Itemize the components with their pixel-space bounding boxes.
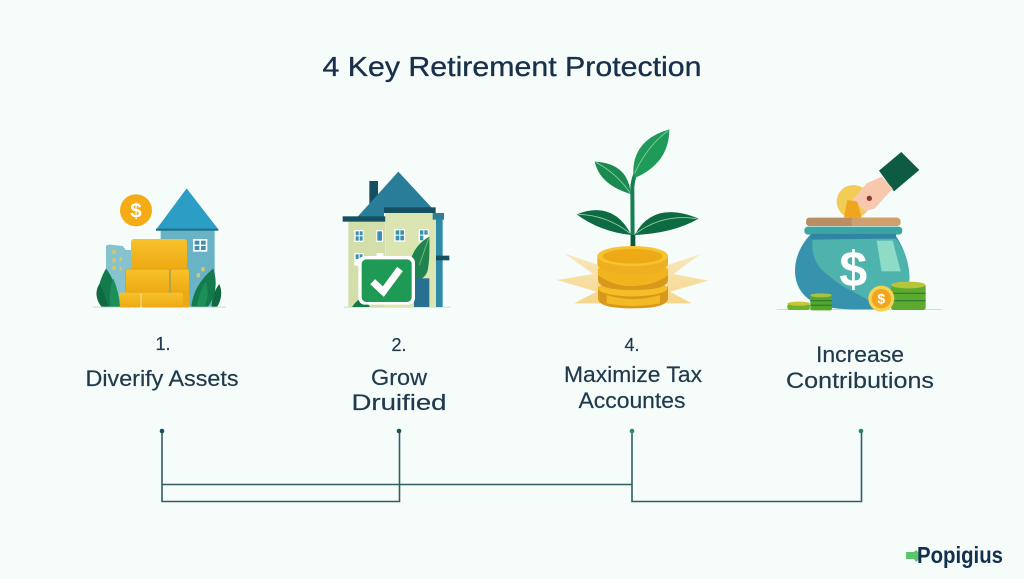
windows: [354, 229, 429, 266]
step 1 label: Diverify Assets: [86, 366, 238, 391]
house roof: [156, 188, 218, 231]
hand sleeve: [879, 152, 919, 191]
coin: $: [130, 200, 142, 223]
upper right leaf: [633, 129, 669, 178]
connector diagram: [160, 429, 863, 502]
icon: house with check badge: [343, 172, 451, 308]
right wing: [385, 212, 436, 307]
window: [193, 239, 207, 252]
step 2 label: [352, 335, 446, 415]
lower left leaf: [577, 210, 631, 235]
bag neck: [804, 218, 902, 239]
dollar sign: $: [839, 242, 867, 298]
stem: [632, 170, 637, 247]
step 4 label: 4.: [624, 335, 640, 355]
increase contributions label: Contributions: [786, 368, 934, 393]
check badge: [358, 256, 415, 305]
step 2 label: Grow: [371, 365, 427, 390]
small stacks: [787, 293, 832, 310]
logo: Popigius: [917, 542, 1003, 568]
step 4 label: [564, 335, 702, 413]
front coin: $: [877, 291, 885, 307]
step 1 label: 1.: [155, 334, 171, 354]
hand: [844, 177, 893, 217]
step 2 label: Druified: [352, 390, 446, 415]
step 4 label: Accountes: [578, 388, 686, 413]
step 1 label: [86, 334, 238, 391]
left wing: [348, 221, 385, 307]
house body: [161, 230, 215, 307]
ground line: [93, 306, 226, 309]
gold bars: [119, 239, 189, 307]
roof: [357, 172, 432, 217]
ground line: [344, 306, 451, 309]
icon: hand dropping coin in money bag: [777, 152, 942, 312]
increase contributions label: [786, 342, 934, 393]
burst: [557, 253, 708, 303]
lower right leaf: [635, 212, 699, 235]
ground line: [777, 308, 942, 311]
upper left leaf: [595, 162, 631, 194]
right leaves: [191, 268, 221, 307]
city building: [106, 245, 133, 307]
increase contributions label: Increase: [816, 342, 904, 367]
bag highlight: [877, 241, 901, 271]
coin stack: [597, 246, 668, 308]
left leaves: [96, 268, 120, 307]
bag body: [795, 235, 909, 309]
side pipe: [433, 213, 449, 307]
icon: plant growing from coins: [557, 129, 708, 308]
front coin: [868, 286, 894, 312]
large stack: [891, 282, 926, 310]
step 2 label: 2.: [391, 335, 407, 355]
chimney: [369, 181, 378, 204]
plant and door: [352, 237, 429, 307]
title: 4 Key Retirement Protection: [322, 51, 702, 82]
logo arrow mark: [906, 550, 923, 562]
step 4 label: Maximize Tax: [564, 362, 702, 387]
large coin: [837, 185, 870, 218]
icon: gold bars and house: [93, 188, 226, 308]
